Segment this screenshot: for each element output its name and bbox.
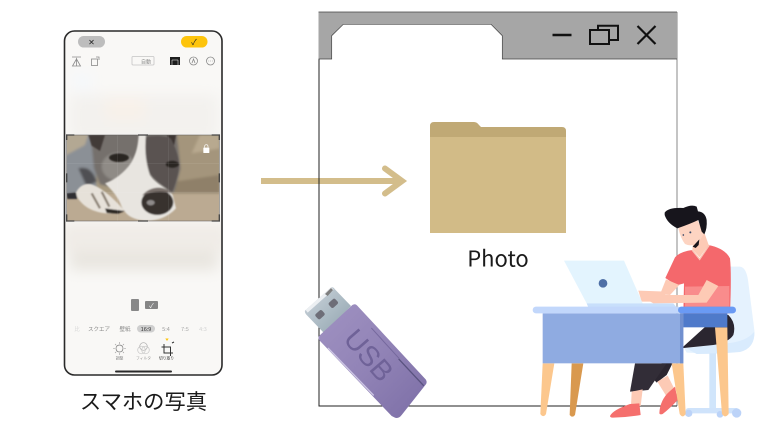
editing tool: adjust: 調整	[116, 356, 123, 362]
aspect ratio options: 16:9	[141, 325, 151, 333]
editing tool: filter: フィルタ	[136, 356, 151, 362]
cancel button: ✕	[88, 38, 95, 47]
shoes	[610, 387, 678, 418]
lock icon	[203, 145, 209, 153]
icon: USB drive	[305, 287, 427, 418]
editing tool: adjust	[113, 342, 126, 362]
auto label: 自動	[141, 58, 151, 66]
arrow	[261, 168, 402, 194]
USB label: USB	[337, 323, 399, 388]
laptop	[564, 261, 677, 307]
desk legs	[570, 363, 583, 417]
aspect ratio options	[74, 325, 207, 333]
desk	[533, 307, 736, 417]
shirt	[665, 245, 731, 313]
confirm button: ✓	[191, 38, 197, 47]
orientation toggles: ✓	[149, 302, 154, 310]
title bar	[318, 12, 677, 59]
phone body	[64, 31, 222, 375]
editing tool: filter	[136, 343, 151, 362]
hair	[665, 206, 707, 234]
body	[318, 304, 427, 418]
dog photo	[66, 134, 220, 222]
orientation toggles	[131, 299, 158, 311]
window frame	[676, 12, 678, 406]
aspect ratio options: スクエア	[88, 325, 110, 333]
home indicator	[115, 370, 172, 372]
aspect ratio options: 壁紙	[119, 325, 131, 333]
panel: explorer window	[318, 12, 677, 406]
aspect ratio icon	[170, 57, 180, 65]
pants and legs	[630, 313, 734, 406]
editing tool: crop	[159, 338, 174, 362]
confirm button	[181, 36, 208, 48]
icon: minimize	[552, 34, 572, 36]
aspect ratio options: 5:4	[162, 325, 170, 333]
aspect ratio options: 比	[74, 325, 80, 333]
panel: smartphone photo editor	[60, 31, 230, 375]
aspect ratio options: 4:3	[199, 325, 207, 333]
icon: folder	[430, 122, 566, 233]
groove	[372, 328, 399, 358]
chair	[683, 267, 754, 418]
blurred photo background	[66, 98, 221, 272]
aspect ratio options: 7:5	[181, 325, 189, 333]
caption: smartphone photo: スマホの写真	[80, 385, 207, 416]
connector	[305, 287, 351, 333]
illustration: person working at desk	[533, 206, 754, 418]
highlight	[328, 348, 373, 395]
editing tool: crop: 切り取り	[159, 356, 174, 362]
label: Photo: Photo	[467, 242, 529, 274]
cancel button	[78, 36, 105, 48]
crop handles	[67, 135, 219, 221]
neck and head	[678, 218, 709, 257]
arms	[638, 279, 718, 303]
icon: close	[638, 26, 656, 44]
icon: restore	[590, 26, 618, 44]
toolbar icons	[72, 56, 214, 66]
